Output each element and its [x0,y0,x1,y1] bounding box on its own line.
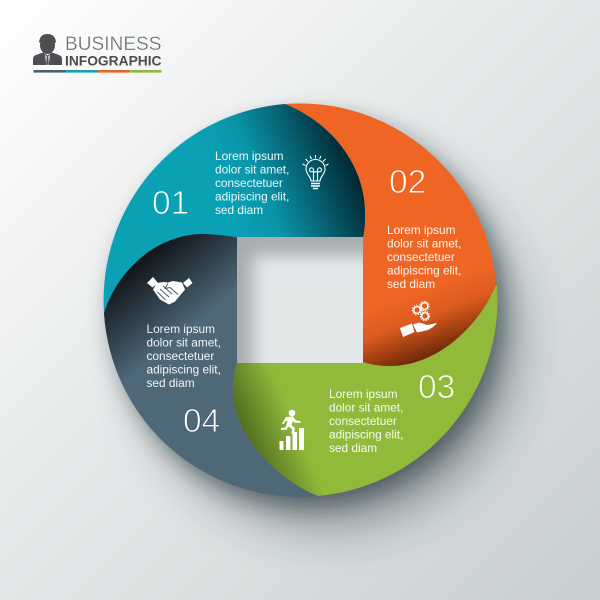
text block 04: dolor sit amet, [146,336,221,350]
number 03: 03 [418,369,455,406]
logo colour bar [34,70,162,73]
text block 04: Lorem ipsum [146,322,215,336]
text block 04: sed diam [146,376,195,390]
text block 03: consectetuer [329,414,397,428]
text block 02: sed diam [387,277,435,291]
segment 04: dark slate [104,234,318,497]
icon: handshake [147,277,192,304]
number 04: 04 [183,403,220,440]
segment 01: teal [104,104,365,313]
text block 01: consectetuer [215,176,283,190]
text block 03: Lorem ipsum [329,387,398,401]
segment 03: green [233,285,498,496]
text block 01: sed diam [215,203,263,217]
text block 04: adipiscing elit, [146,362,221,376]
number 02: 02 [389,164,426,201]
icon: light bulb [302,155,328,188]
text block 02: consectetuer [387,250,455,264]
text block 01: dolor sit amet, [215,162,289,176]
logo [33,33,162,73]
segment 02: orange [285,103,496,366]
icon: hand with gears [400,301,437,337]
centre square [237,237,363,363]
number 01: 01 [152,185,189,222]
text block 02: Lorem ipsum [387,223,456,237]
text block 03: sed diam [329,441,377,455]
icon: runner on bars [280,410,304,450]
text block 03: adipiscing elit, [329,428,403,442]
circle drop shadow [114,117,518,528]
text block 02: dolor sit amet, [387,236,461,250]
text block 01: adipiscing elit, [215,190,289,204]
text block 01: Lorem ipsum [215,149,284,163]
icon: businessman [33,34,62,65]
text block 03: dolor sit amet, [329,400,403,414]
text block 02: adipiscing elit, [387,264,461,278]
logo heading: business: BUSINESS [65,33,162,55]
text block 04: consectetuer [146,349,214,363]
logo heading: infographic: INFOGRAPHIC [65,54,162,68]
